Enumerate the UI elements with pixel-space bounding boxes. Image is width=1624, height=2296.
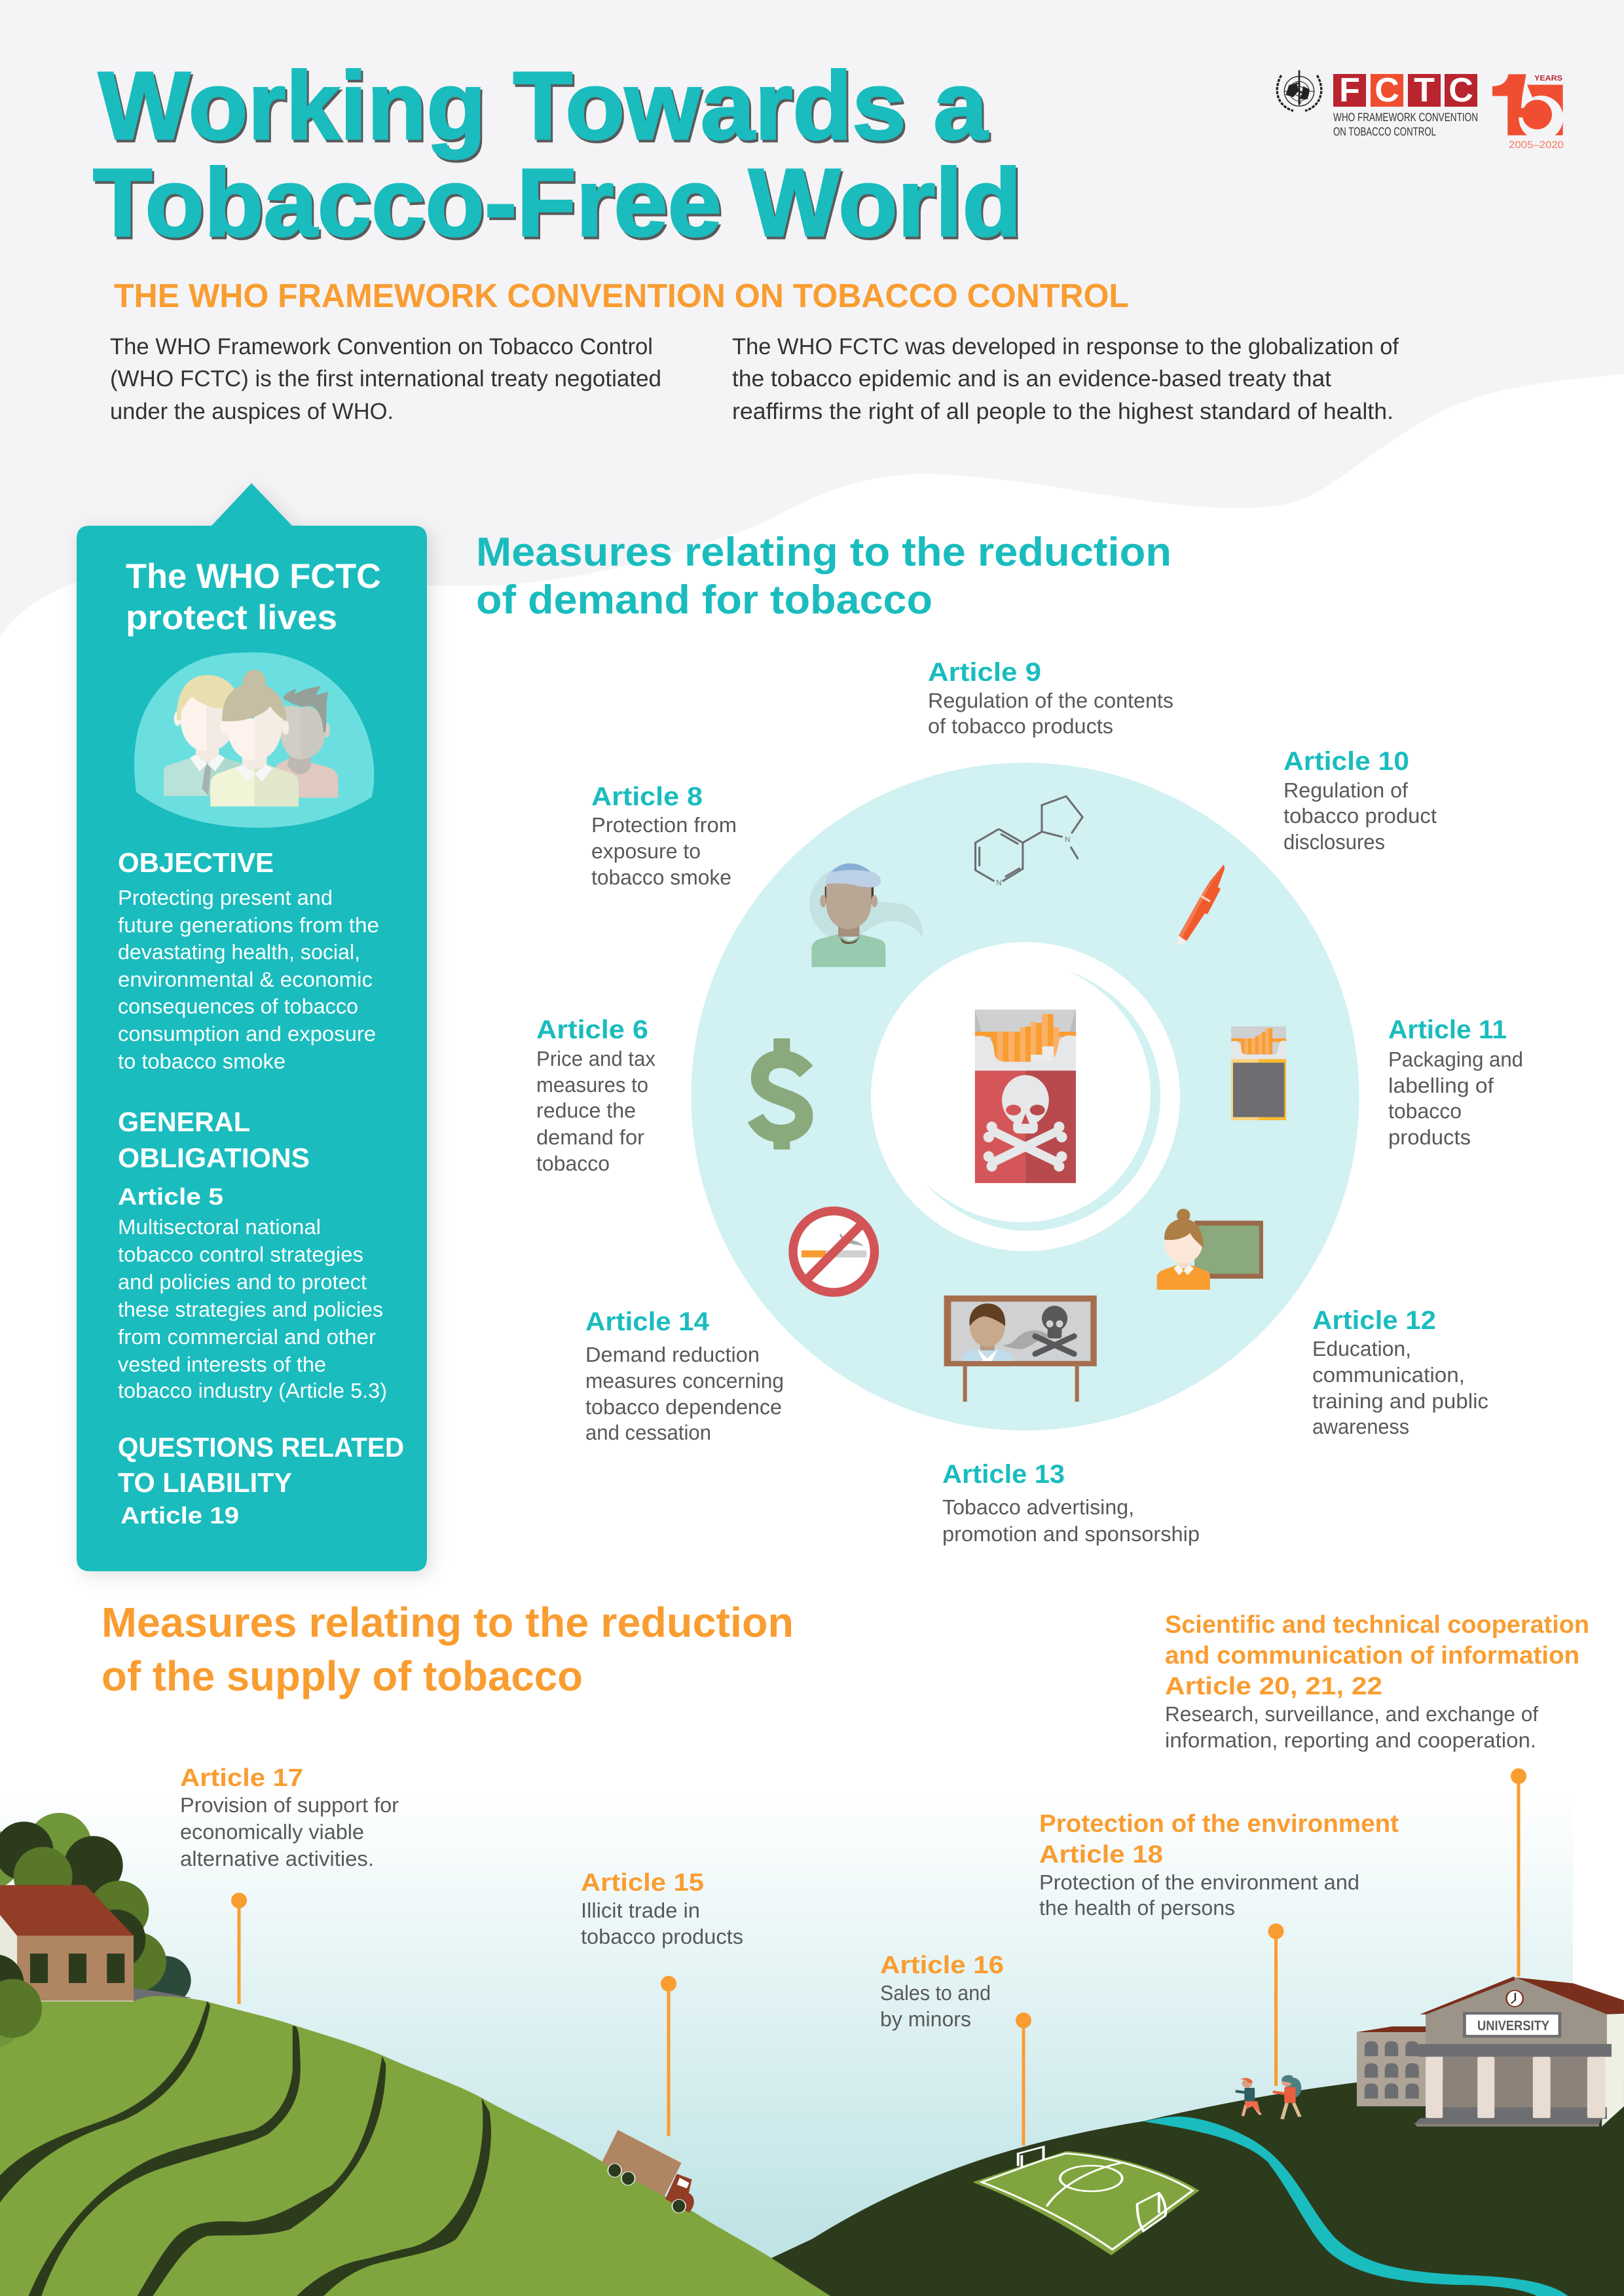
article 6: Price and tax <box>536 1047 655 1070</box>
icon: nicotine molecule: N <box>1065 835 1070 844</box>
article 8: tobacco smoke <box>591 866 731 889</box>
article 16 <box>880 1952 1004 2031</box>
article 14: tobacco dependence <box>585 1395 782 1419</box>
icon: billboard <box>944 1296 1097 1402</box>
general obligations: and policies and to protect <box>118 1270 367 1294</box>
article 18: the health of persons <box>1039 1896 1235 1920</box>
demand circle <box>692 763 1359 1430</box>
pin: article 18 <box>1268 1923 1283 2086</box>
article 15 <box>581 1869 743 1948</box>
general obligations: vested interests of the <box>118 1353 326 1376</box>
FCTC caption: WHO FRAMEWORK CONVENTION <box>1333 111 1478 124</box>
article 17: alternative activities. <box>180 1847 374 1870</box>
scientific cooperation: Scientific and technical cooperation <box>1165 1611 1589 1639</box>
article 15: Illicit trade in <box>581 1899 700 1922</box>
icon: dollar sign <box>756 1038 806 1150</box>
title <box>93 52 1022 257</box>
article 11: Article 11 <box>1388 1015 1507 1044</box>
article 9: of tobacco products <box>928 714 1113 738</box>
intro text: left column: The WHO Framework Convention on Tobacco Control <box>110 334 653 359</box>
logos: WHO, FCTC, 15 years: 2005–2020 <box>1509 139 1564 151</box>
logos: WHO, FCTC, 15 years <box>1277 70 1565 151</box>
dark hill <box>771 2075 1624 2296</box>
article 10: tobacco product <box>1283 804 1437 828</box>
panel: the WHO FCTC protect lives <box>77 483 427 1571</box>
general obligations <box>118 1106 387 1402</box>
intro text: right column: reaffirms the right of all people to the highest standard of health. <box>732 399 1393 424</box>
icon: nicotine molecule <box>976 796 1082 887</box>
heading: supply: of the supply of tobacco <box>101 1652 583 1700</box>
article 17: economically viable <box>180 1820 364 1844</box>
heading: supply: Measures relating to the reduction <box>101 1599 794 1646</box>
article 6: measures to <box>536 1073 648 1097</box>
article 14: Article 14 <box>585 1307 710 1336</box>
article 18 <box>1039 1810 1399 1920</box>
icon: university building <box>1357 1977 1624 2126</box>
objective: environmental & economic <box>118 968 373 991</box>
objective: consumption and exposure <box>118 1022 376 1046</box>
article 18: Article 18 <box>1039 1841 1163 1868</box>
article 15: Article 15 <box>581 1869 704 1897</box>
article 12: training and public <box>1312 1389 1488 1413</box>
general obligations: OBLIGATIONS <box>118 1142 310 1173</box>
general obligations: these strategies and policies <box>118 1298 383 1321</box>
article 13: promotion and sponsorship <box>942 1522 1200 1546</box>
FCTC squares: F <box>1339 71 1360 109</box>
article 16: Article 16 <box>880 1952 1004 1979</box>
icon: smoker with cap <box>809 864 923 967</box>
article 6: tobacco <box>536 1152 610 1175</box>
scientific cooperation: and communication of information <box>1165 1642 1579 1669</box>
general obligations: tobacco industry (Article 5.3) <box>118 1379 387 1402</box>
article 9 <box>928 658 1173 738</box>
questions related to liability: QUESTIONS RELATED <box>118 1432 404 1463</box>
icon: no smoking <box>792 1211 875 1293</box>
icon: 15 years <box>1492 74 1565 146</box>
objective: future generations from the <box>118 913 379 937</box>
icon: tree foreground <box>0 1954 42 2048</box>
article 13: Tobacco advertising, <box>942 1495 1134 1519</box>
icon: small cigarette pack with plain packaging <box>1231 1027 1286 1120</box>
objective <box>118 847 379 1073</box>
icon: pen <box>1177 864 1225 946</box>
heading: demand: of demand for tobacco <box>476 577 932 623</box>
article 12 <box>1312 1306 1488 1438</box>
subtitle: THE WHO FRAMEWORK CONVENTION ON TOBACCO CONTROL <box>114 277 1129 314</box>
questions related to liability <box>118 1432 404 1529</box>
article 11: products <box>1388 1125 1471 1149</box>
article 18: Protection of the environment <box>1039 1810 1399 1838</box>
pin: articles 20, 21, 22 <box>1511 1768 1526 1977</box>
clock <box>1506 1990 1523 2007</box>
article 13 <box>942 1460 1200 1546</box>
article 14: and cessation <box>585 1421 711 1444</box>
general obligations: Multisectoral national <box>118 1215 321 1239</box>
sky gradient <box>0 1794 1573 2296</box>
title: Tobacco-Free World <box>93 149 1022 257</box>
icon: nicotine molecule: N <box>996 879 1002 887</box>
logos: WHO, FCTC, 15 years: YEARS <box>1534 75 1562 82</box>
title: Working Towards a <box>98 52 988 160</box>
article 11: tobacco <box>1388 1099 1462 1123</box>
general obligations: from commercial and other <box>118 1325 376 1349</box>
objective: to tobacco smoke <box>118 1049 286 1073</box>
pin: article 15 <box>661 1976 676 2136</box>
main building <box>1602 2012 1624 2126</box>
article 11 <box>1388 1015 1523 1149</box>
intro text: left column <box>110 334 661 424</box>
objective: Protecting present and <box>118 886 333 909</box>
icon: teacher and blackboard <box>1157 1209 1263 1290</box>
article 16: by minors <box>880 2007 971 2031</box>
article 9: Regulation of the contents <box>928 689 1173 712</box>
article 18: Protection of the environment and <box>1039 1870 1359 1894</box>
article 12: awareness <box>1312 1415 1409 1438</box>
article 17 <box>180 1764 399 1870</box>
article 6: demand for <box>536 1125 644 1149</box>
scientific cooperation: information, reporting and cooperation. <box>1165 1728 1536 1752</box>
intro text: left column: under the auspices of WHO. <box>110 399 394 424</box>
article 8: exposure to <box>591 839 701 863</box>
article 6: Article 6 <box>536 1015 648 1044</box>
ring <box>692 763 1359 1430</box>
river <box>1143 2117 1568 2296</box>
icon: football pitch <box>972 2147 1200 2255</box>
article 11: labelling of <box>1388 1074 1494 1097</box>
article 6: reduce the <box>536 1099 636 1122</box>
article 12: Article 12 <box>1312 1306 1436 1335</box>
terraces <box>0 2001 491 2296</box>
article 11: Packaging and <box>1388 1048 1523 1071</box>
article 14: measures concerning <box>585 1369 784 1393</box>
heading: supply <box>101 1599 794 1700</box>
FCTC caption <box>1333 111 1478 138</box>
general obligations: GENERAL <box>118 1106 250 1137</box>
scientific cooperation: Research, surveillance, and exchange of <box>1165 1702 1538 1726</box>
FCTC squares: C <box>1449 71 1473 109</box>
article 14 <box>585 1307 784 1444</box>
article 10: disclosures <box>1283 830 1385 854</box>
objective: devastating health, social, <box>118 940 360 964</box>
icon: children walking <box>1236 2075 1301 2119</box>
article 17: Article 17 <box>180 1764 303 1792</box>
intro text: left column: (WHO FCTC) is the first international treaty negotiated <box>110 366 661 392</box>
FCTC caption: ON TOBACCO CONTROL <box>1333 125 1436 138</box>
icon: WHO emblem <box>1277 70 1321 111</box>
university label: UNIVERSITY <box>1477 2018 1549 2033</box>
article 15: tobacco products <box>581 1925 743 1948</box>
questions related to liability: TO LIABILITY <box>118 1467 292 1498</box>
intro text: right column: The WHO FCTC was developed in response to the globalization of <box>732 334 1399 359</box>
panel background <box>77 483 427 1571</box>
panel heading: The WHO FCTC <box>126 557 381 596</box>
left wing <box>1357 2026 1428 2106</box>
pin: article 16 <box>1016 2013 1031 2145</box>
FCTC squares: T <box>1414 71 1435 109</box>
article 6 <box>536 1015 655 1175</box>
article 13: Article 13 <box>942 1460 1065 1489</box>
questions related to liability: Article 19 <box>120 1502 239 1529</box>
sign <box>1463 2012 1561 2037</box>
panel heading: protect lives <box>126 598 337 637</box>
article 10: Regulation of <box>1283 778 1408 802</box>
article 8: Protection from <box>591 813 737 837</box>
article 10 <box>1283 747 1437 854</box>
article 8: Article 8 <box>591 782 703 811</box>
article 8 <box>591 782 737 889</box>
article 10: Article 10 <box>1283 747 1409 776</box>
heading: demand <box>476 530 1172 623</box>
panel heading <box>126 557 381 637</box>
scientific cooperation: Article 20, 21, 22 <box>1165 1673 1382 1700</box>
objective: consequences of tobacco <box>118 994 358 1018</box>
FCTC squares: C <box>1375 71 1399 109</box>
general obligations: Article 5 <box>118 1183 223 1210</box>
objective: OBJECTIVE <box>118 847 274 878</box>
icon: truck <box>602 2130 694 2213</box>
general obligations: tobacco control strategies <box>118 1243 363 1266</box>
FCTC squares <box>1333 71 1477 109</box>
intro text: right column <box>732 334 1399 424</box>
scientific cooperation <box>1165 1611 1589 1752</box>
article 12: communication, <box>1312 1363 1465 1387</box>
intro text: right column: the tobacco epidemic and is an evidence-based treaty that <box>732 366 1331 392</box>
article 17: Provision of support for <box>180 1793 399 1817</box>
article 9: Article 9 <box>928 658 1041 687</box>
icon: cigarette pack with skull <box>975 1010 1076 1183</box>
article 16: Sales to and <box>880 1981 991 2005</box>
icon: trees and house <box>0 1813 192 2005</box>
icon: three people under dome <box>134 653 374 828</box>
green hill <box>0 1996 830 2296</box>
pin: article 17 <box>231 1893 247 2004</box>
heading: demand: Measures relating to the reduction <box>476 530 1172 575</box>
article 12: Education, <box>1312 1337 1411 1360</box>
article 14: Demand reduction <box>585 1343 760 1366</box>
